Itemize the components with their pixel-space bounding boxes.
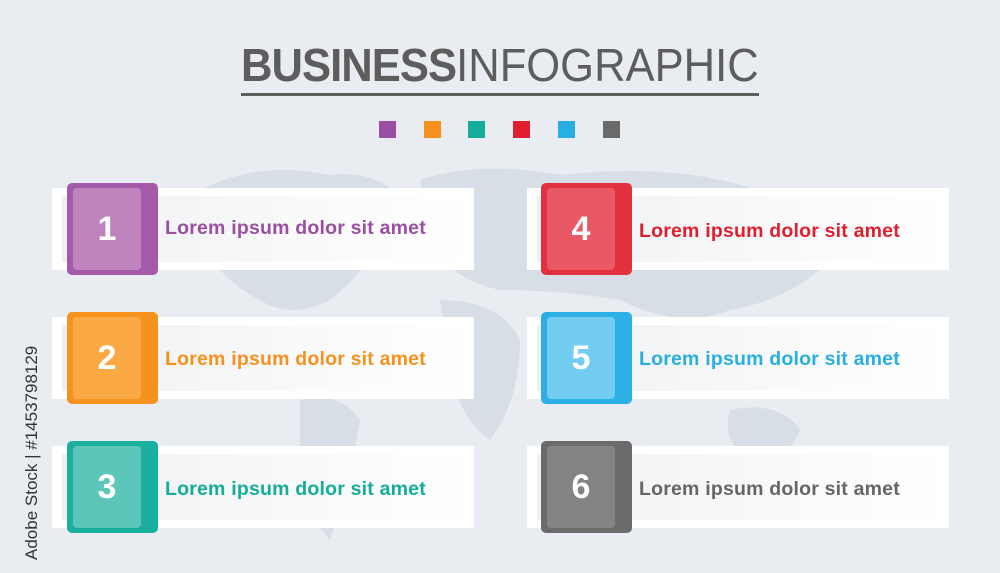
item 1: 1 bbox=[98, 210, 116, 248]
item 5: 5 bbox=[572, 338, 590, 376]
item 3 bbox=[52, 441, 474, 533]
item 6: 6 bbox=[572, 468, 590, 506]
item 2: Lorem ipsum dolor sit amet bbox=[165, 348, 426, 370]
watermark side text: Adobe Stock | #1453798129 bbox=[22, 346, 41, 560]
item 1 bbox=[52, 183, 474, 275]
color legend squares bbox=[379, 121, 620, 138]
item 3: Lorem ipsum dolor sit amet bbox=[165, 478, 426, 500]
item 2: 2 bbox=[98, 338, 116, 376]
title: BUSINESSINFOGRAPHIC bbox=[241, 39, 759, 91]
item 4 bbox=[527, 183, 949, 275]
item 5: Lorem ipsum dolor sit amet bbox=[639, 348, 900, 370]
item 4: 4 bbox=[572, 210, 590, 248]
item 6: Lorem ipsum dolor sit amet bbox=[639, 478, 900, 500]
item 5 bbox=[527, 312, 949, 404]
item 4: Lorem ipsum dolor sit amet bbox=[639, 220, 900, 242]
title underline bbox=[241, 93, 759, 96]
item 3: 3 bbox=[98, 468, 116, 506]
item 6 bbox=[527, 441, 949, 533]
item 1: Lorem ipsum dolor sit amet bbox=[165, 217, 426, 239]
item 2 bbox=[52, 312, 474, 404]
